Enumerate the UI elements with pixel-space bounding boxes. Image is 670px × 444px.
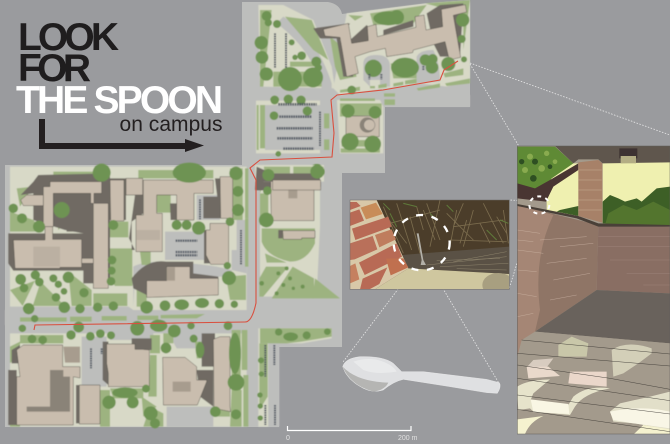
- title: [16, 16, 223, 122]
- red walking route: [34, 61, 458, 330]
- scale label: 0: 0: [286, 435, 290, 442]
- roads and parking: [265, 17, 470, 153]
- left wall: [532, 209, 598, 332]
- scale bar: [286, 426, 418, 442]
- title line: the spoon: THE SPOON: [16, 79, 223, 122]
- roads and parking: [5, 195, 279, 427]
- parked cars: [91, 199, 275, 425]
- ground areas: [10, 167, 332, 427]
- campus map base: [5, 0, 470, 427]
- top building: [273, 5, 467, 190]
- lawns: [10, 167, 340, 427]
- spoon in situ: [417, 233, 426, 265]
- rotunda: [360, 117, 375, 133]
- title line: look: LOOK: [18, 16, 119, 59]
- spoon illustration: [343, 357, 500, 393]
- building shadows: [255, 3, 463, 190]
- map: upper campus: [255, 0, 470, 190]
- sky and foliage: [603, 162, 670, 225]
- building shadows: [8, 167, 322, 425]
- step edges: [517, 340, 670, 432]
- lamp: [619, 148, 637, 163]
- parked cars: [275, 33, 423, 149]
- brick wall: [350, 200, 408, 289]
- ceiling: [555, 146, 670, 163]
- patio floor: [535, 290, 670, 343]
- ground areas: [255, 0, 470, 182]
- buildings: [13, 177, 320, 425]
- dotted connector lines: [343, 63, 670, 385]
- trees: [9, 151, 331, 428]
- steps: [518, 332, 670, 356]
- photo: spoon in the wall corner: [350, 200, 514, 297]
- photo: walled patio steps: [517, 146, 670, 434]
- title line: for: FOR: [18, 47, 91, 90]
- building roof details: [27, 186, 297, 412]
- floor: [375, 268, 509, 289]
- concrete ledge: [402, 247, 509, 274]
- dashed highlight circle: [394, 215, 450, 270]
- subtitle: on campus: [120, 113, 222, 136]
- map: lower campus: [5, 151, 340, 428]
- arrow: [39, 119, 204, 152]
- dashed highlight circle: [529, 196, 549, 214]
- branches: [383, 200, 508, 253]
- trees: [255, 10, 469, 181]
- lawns: [257, 0, 470, 175]
- scale label: 200 m: 200 m: [398, 435, 418, 442]
- sunlight patches: [517, 337, 670, 434]
- back wall: [597, 225, 670, 293]
- brick pillar: [578, 160, 602, 223]
